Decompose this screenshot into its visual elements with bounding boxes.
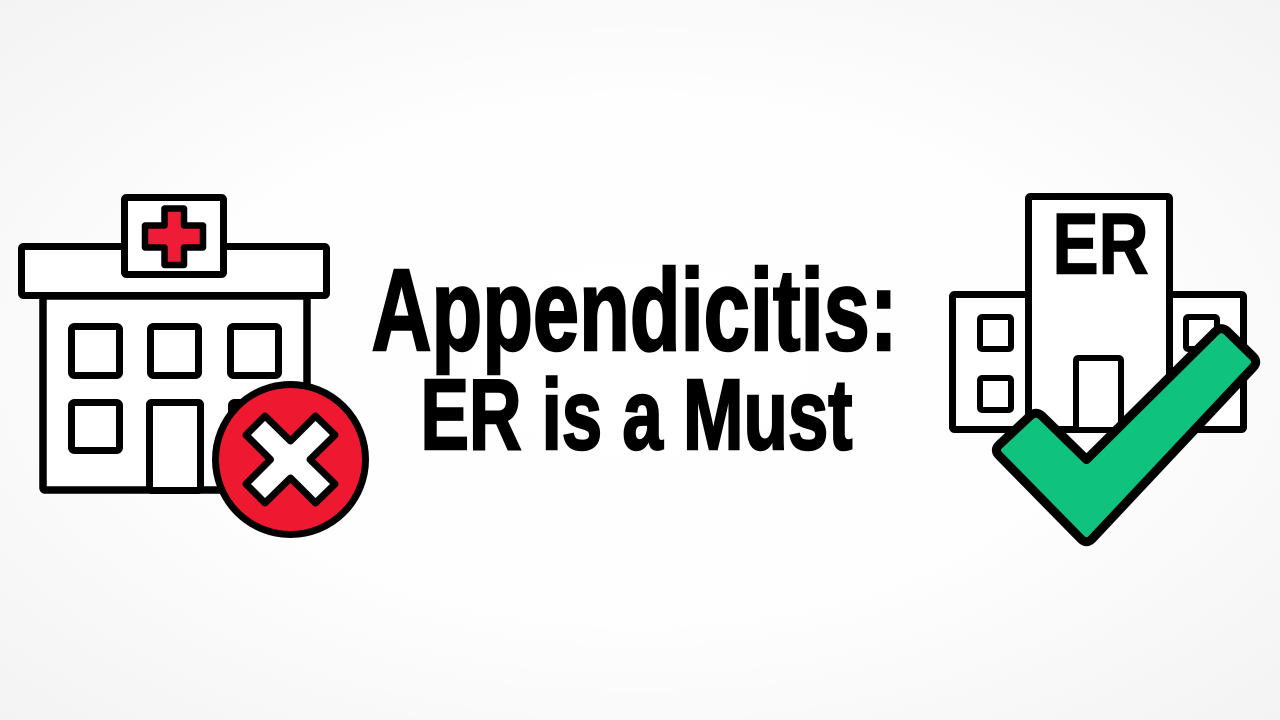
title: ER is a Must bbox=[420, 359, 852, 471]
icon: ER building with green check bbox=[952, 196, 1256, 542]
title bbox=[372, 245, 898, 471]
title: Appendicitis: bbox=[372, 245, 898, 375]
icon: hospital with red X bbox=[22, 198, 366, 534]
icon: ER building with green check: ER bbox=[1052, 196, 1148, 292]
